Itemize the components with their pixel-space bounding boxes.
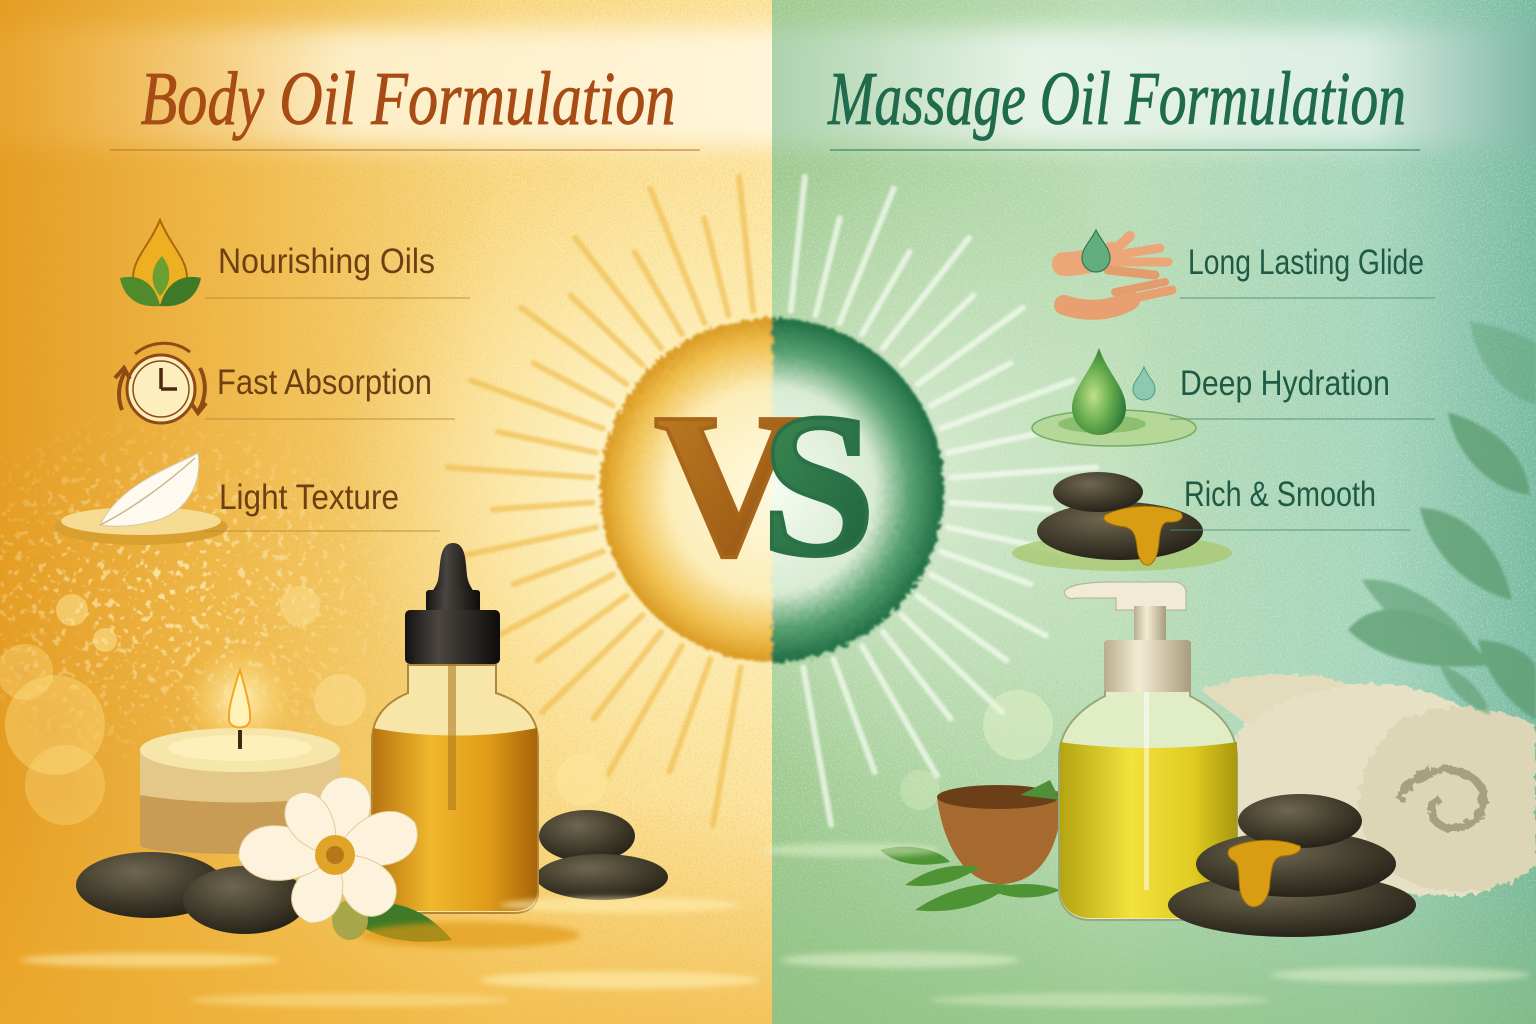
feature: Nourishing Oils	[120, 220, 470, 306]
oil	[373, 728, 537, 911]
VS lettering: S	[761, 370, 876, 599]
bottle glass	[372, 665, 538, 913]
feature: Fast Absorption: Fast Absorption	[217, 363, 432, 402]
feature: Light Texture: Light Texture	[219, 478, 399, 517]
VS lettering: V	[654, 370, 803, 599]
panel: body oil background	[0, 0, 772, 1024]
feature: Long Lasting Glide	[1064, 230, 1435, 310]
bottle glass	[1059, 690, 1237, 920]
icon: green drops on ripple	[1032, 348, 1196, 446]
left stones	[76, 810, 668, 934]
dropper cap	[430, 543, 476, 600]
wooden bowl and leaves	[880, 780, 1062, 911]
white flower	[238, 773, 452, 942]
feature: Long Lasting Glide: Long Lasting Glide	[1188, 243, 1424, 282]
VS lettering	[654, 370, 876, 599]
feature: Rich & Smooth	[1012, 472, 1410, 571]
right leaves	[1348, 322, 1536, 720]
oil	[1060, 742, 1237, 918]
feature: Fast Absorption	[115, 343, 455, 423]
dropper bottle	[372, 543, 538, 913]
icon: oil drop with leaves	[120, 220, 201, 306]
sunburst rays	[448, 177, 1096, 825]
icon: feather on dish	[54, 453, 228, 545]
panel: massage oil background	[772, 0, 1536, 1024]
feature: Deep Hydration	[1032, 348, 1435, 446]
icon: stacked stones with honey	[1012, 472, 1232, 571]
feature: Rich & Smooth: Rich & Smooth	[1184, 475, 1376, 514]
pump bottle	[1059, 582, 1237, 920]
towel roll	[1200, 674, 1536, 895]
oil reflections	[20, 843, 1530, 1007]
feature: Nourishing Oils: Nourishing Oils	[218, 242, 435, 281]
feature: Deep Hydration: Deep Hydration	[1180, 364, 1390, 403]
VS badge	[600, 318, 944, 662]
icon: hands with oil drop	[1064, 230, 1172, 310]
feature: Light Texture	[54, 453, 440, 545]
icon: clock with arrows	[115, 343, 206, 423]
bokeh lights	[0, 586, 1053, 825]
candle	[140, 645, 340, 854]
pump head	[1064, 582, 1186, 610]
title: Body Oil Formulation: Body Oil Formulation	[140, 57, 676, 141]
right stone stack with honey	[1168, 794, 1416, 937]
